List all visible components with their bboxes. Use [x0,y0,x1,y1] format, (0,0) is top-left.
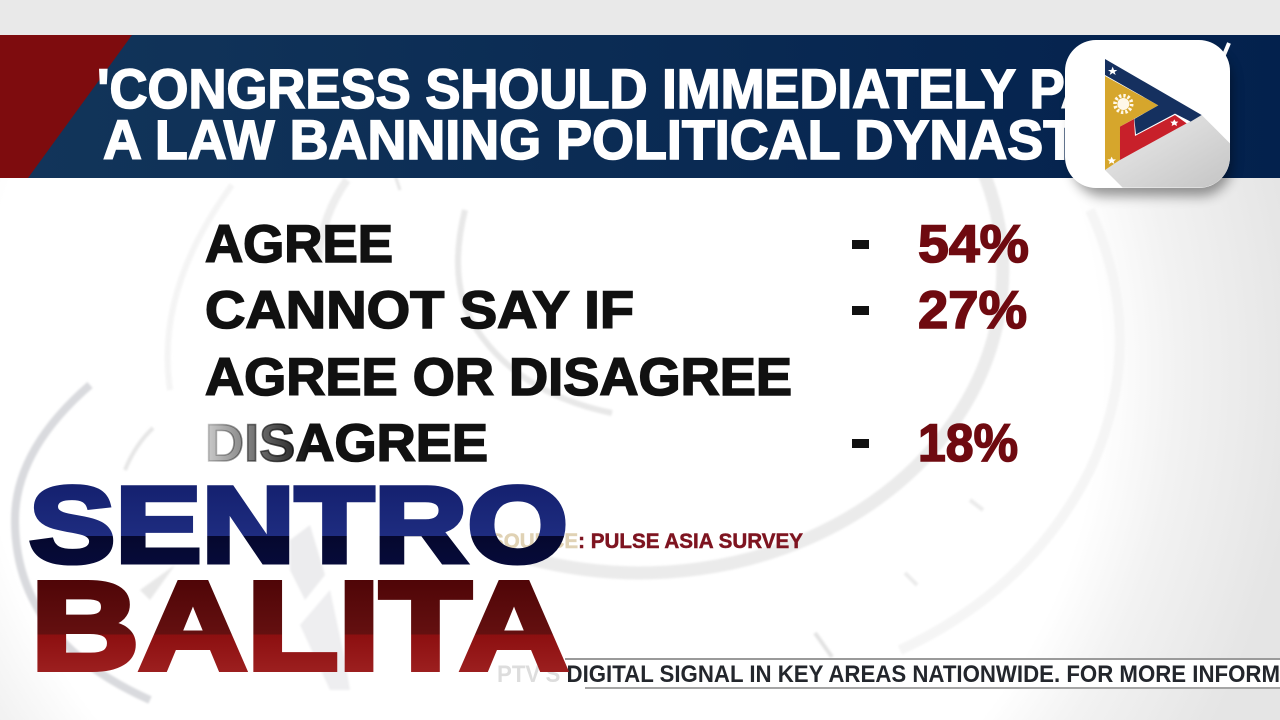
source note: SOURCE: PULSE ASIA SURVEY [490,530,803,553]
wordmark: sentro: SENTRO [29,464,568,585]
row: agree [205,215,1029,274]
logo flag triangle mark [1105,59,1230,190]
logo badge [1065,40,1232,196]
top grey strip [0,0,1280,35]
headline slash fragment [1221,43,1229,62]
row: disagree: DISAGREE [205,414,488,473]
headline line 2: A LAW BANNING POLITICAL DYNASTIES [103,108,1163,171]
news ticker [497,658,1280,689]
row: disagree [205,414,1018,473]
banner navy background [0,35,1280,178]
show logo [29,464,568,696]
results list [205,215,1029,473]
row: cannot say: CANNOT SAY IF [205,281,634,340]
banner red slanted accent [0,35,132,178]
row: cannot say [205,281,1027,407]
row: agree: AGREE [205,215,393,274]
row: disagree: 18% [918,414,1018,473]
row: cannot say: AGREE OR DISAGREE [205,348,792,407]
wordmark: balita: BALITA [31,557,568,696]
logo white tile [1065,40,1230,188]
headline line 1: 'CONGRESS SHOULD IMMEDIATELY PASS [97,57,1169,120]
header banner [0,35,1280,178]
row: cannot say: 27% [918,281,1027,340]
row: agree: 54% [918,215,1029,274]
logo drop shadow [1072,50,1232,196]
ticker bar [565,659,1280,688]
background watermark: rings and map [15,130,1120,700]
